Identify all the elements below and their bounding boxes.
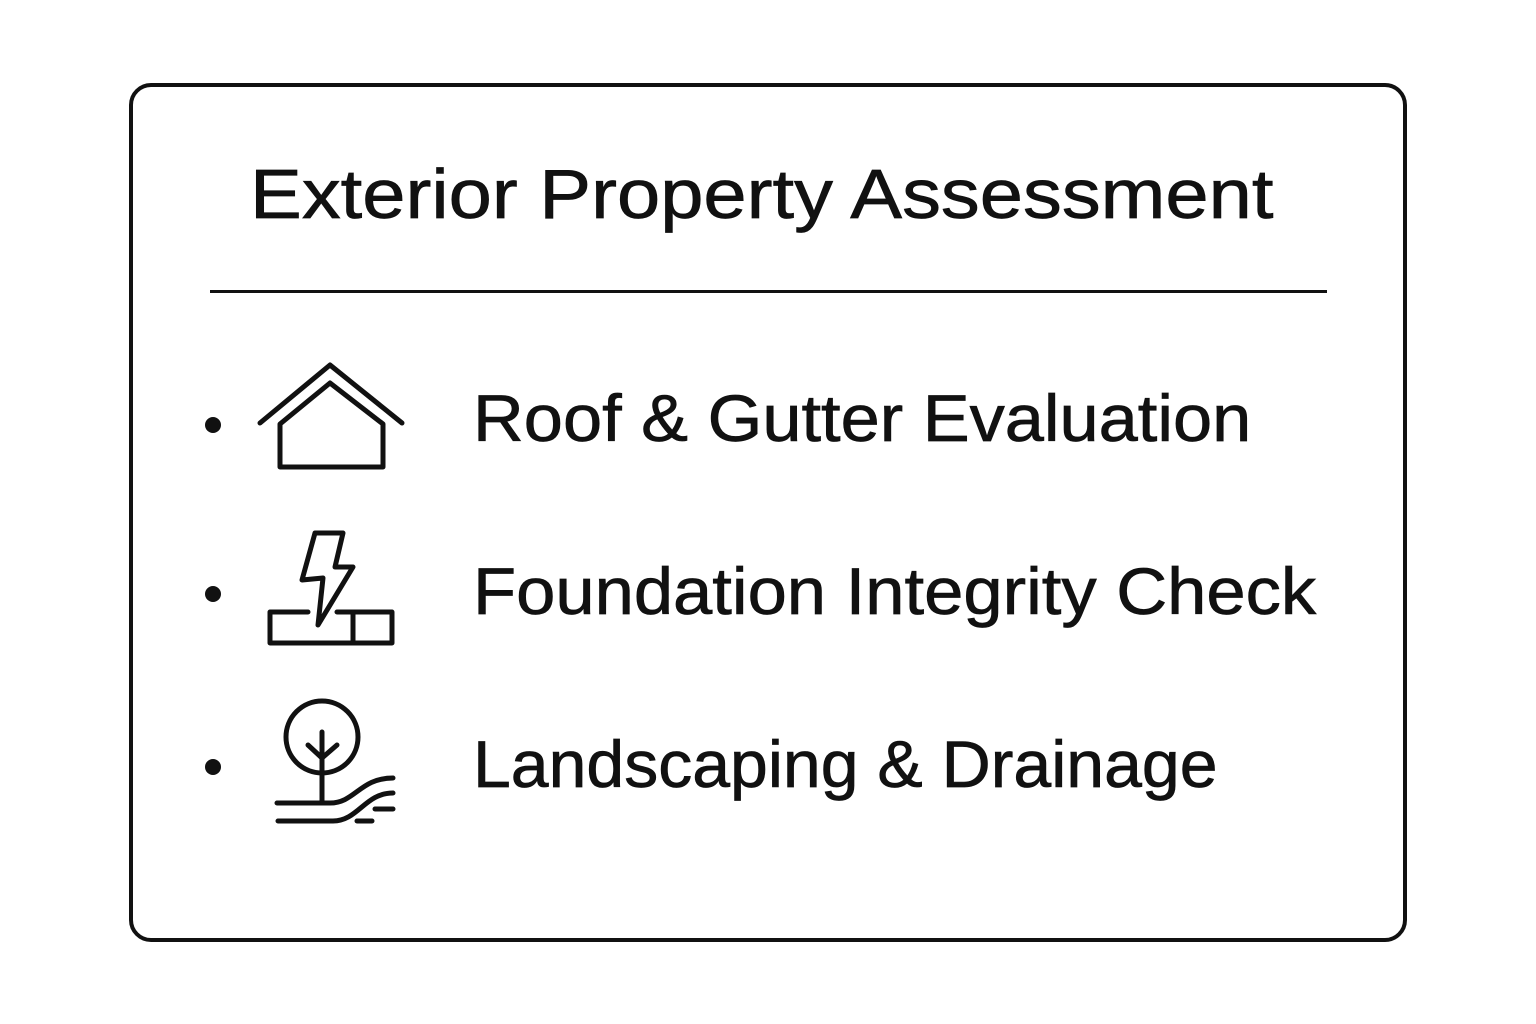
icon: cracked foundation [270, 533, 392, 643]
bullet 1 [205, 417, 221, 433]
panel: assessment card [129, 83, 1407, 942]
bullet 3 [205, 759, 221, 775]
item text: landscaping: Landscaping & Drainage [473, 727, 1218, 801]
item text: roof: Roof & Gutter Evaluation [473, 381, 1251, 455]
icon: tree and drainage [277, 701, 393, 821]
bullet 2 [205, 586, 221, 602]
icon: house [260, 365, 402, 467]
title: Exterior Property Assessment [250, 155, 1273, 233]
item text: foundation: Foundation Integrity Check [473, 554, 1316, 628]
